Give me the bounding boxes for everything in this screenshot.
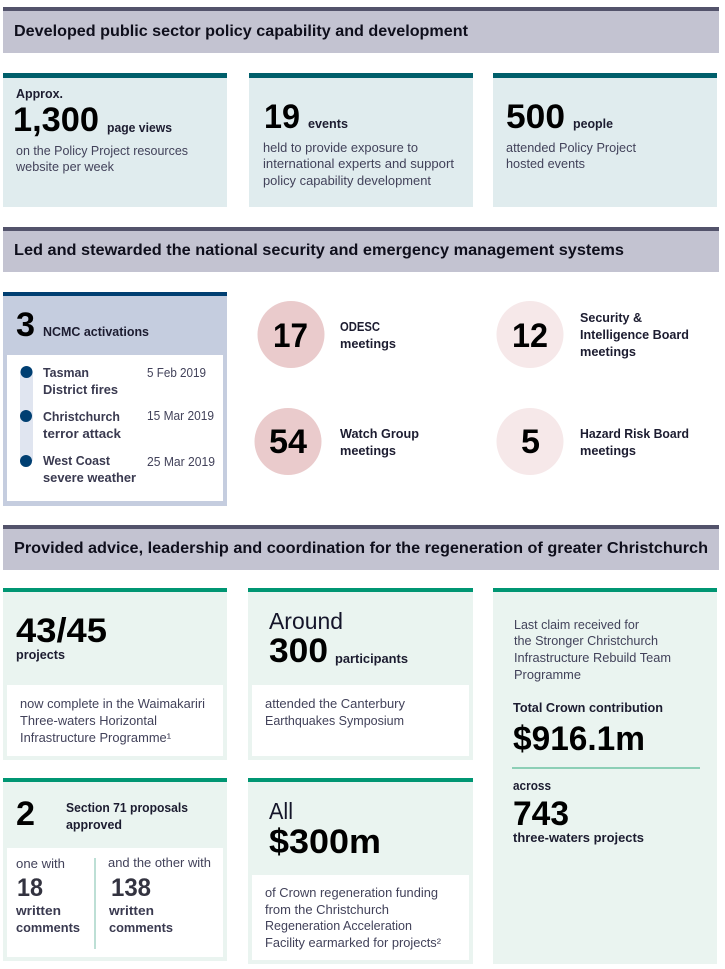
- stat: Security and Intelligence Board meetings: Intelligence Board: [580, 327, 689, 342]
- panel: participants: [248, 588, 473, 760]
- panel: NCMC activations: District fires: [43, 382, 118, 397]
- stat: Security and Intelligence Board meetings: 12: [512, 317, 548, 355]
- panel: people: 500: [506, 98, 565, 136]
- panel: participants: Around: [269, 608, 343, 634]
- panel: projects: Infrastructure Programme¹: [20, 730, 172, 745]
- panel: NCMC activations: 15 Mar 2019: [147, 408, 214, 423]
- panel: page views: website per week: [15, 159, 114, 174]
- panel: regeneration funding: All: [269, 798, 293, 824]
- timeline: [20, 366, 33, 467]
- panel: participants: participants: [335, 651, 408, 666]
- panel: projects: [3, 588, 227, 760]
- stat: Watch Group meetings: [254, 408, 419, 475]
- panel: Crown contribution: Total Crown contribution: [513, 700, 663, 715]
- panel: regeneration funding: of Crown regeneration funding: [265, 885, 438, 900]
- panel: Section 71 proposals: and the other with: [108, 855, 211, 870]
- panel: regeneration funding: from the Christchurch: [265, 902, 389, 917]
- section header: policy capability: Developed public sector policy capability and development: [14, 23, 469, 40]
- panel: Crown contribution: [493, 588, 717, 964]
- stat: Hazard Risk Board meetings: Hazard Risk Board: [580, 426, 689, 441]
- panel: events: events: [308, 116, 348, 131]
- stat: ODESC meetings: [258, 301, 396, 368]
- stat: ODESC meetings: meetings: [340, 336, 396, 351]
- panel: Section 71 proposals: one with: [16, 856, 65, 871]
- panel: NCMC activations: 25 Mar 2019: [147, 454, 215, 469]
- panel: people: people: [573, 116, 613, 131]
- stat: Watch Group meetings: meetings: [340, 443, 396, 458]
- panel: NCMC activations: terror attack: [43, 426, 122, 441]
- panel: Section 71 proposals: 138: [111, 874, 151, 902]
- panel: page views: page views: [107, 120, 172, 135]
- panel: regeneration funding: [248, 778, 473, 964]
- panel: Crown contribution: Infrastructure Rebuild Team: [514, 650, 671, 665]
- panel: events: 19: [264, 98, 300, 136]
- panel: projects: projects: [16, 647, 65, 662]
- panel: NCMC activations: West Coast: [43, 453, 111, 468]
- panel: events: [249, 73, 473, 207]
- panel: NCMC activations: Christchurch: [43, 409, 120, 424]
- panel: page views: [3, 73, 227, 207]
- panel: events: policy capability development: [263, 173, 431, 188]
- panel: Crown contribution: three-waters projects: [513, 830, 644, 845]
- panel: NCMC activations: [3, 292, 227, 506]
- panel: participants: 300: [269, 632, 328, 670]
- panel: page views: on the Policy Project resources: [16, 143, 188, 158]
- stat: Security and Intelligence Board meetings: Security &: [580, 310, 642, 325]
- stat: Security and Intelligence Board meetings: meetings: [580, 344, 636, 359]
- panel: Section 71 proposals: 18: [17, 874, 43, 902]
- panel: NCMC activations: 3: [16, 306, 35, 344]
- panel: Section 71 proposals: 2: [16, 795, 35, 833]
- section header: regeneration: Provided advice, leadership and coordination for the regeneration of greater Christchurch: [14, 540, 708, 557]
- panel: projects: 43/45: [16, 612, 107, 650]
- panel: Crown contribution: 743: [513, 795, 569, 833]
- panel: Crown contribution: Last claim received for: [514, 617, 640, 632]
- panel: projects: now complete in the Waimakariri: [20, 696, 205, 711]
- panel: people: [493, 73, 717, 207]
- panel: Section 71 proposals: approved: [66, 817, 122, 832]
- panel: NCMC activations: severe weather: [43, 470, 136, 485]
- panel: regeneration funding: Regeneration Acceleration: [265, 918, 412, 933]
- section header: policy capability: [3, 7, 719, 53]
- stat: Watch Group meetings: 54: [269, 423, 307, 461]
- panel: Section 71 proposals: comments: [109, 920, 173, 935]
- panel: people: attended Policy Project: [506, 140, 636, 155]
- panel: page views: Approx.: [16, 86, 63, 101]
- stat: ODESC meetings: ODESC: [340, 319, 381, 334]
- stat: Watch Group meetings: Watch Group: [340, 426, 419, 441]
- section header: regeneration: [3, 525, 719, 570]
- panel: regeneration funding: $300m: [269, 823, 381, 861]
- panel: Section 71 proposals: [3, 778, 227, 961]
- panel: NCMC activations: NCMC activations: [43, 324, 149, 339]
- panel: Crown contribution: the Stronger Christchurch: [514, 633, 658, 648]
- panel: Crown contribution: $916.1m: [513, 720, 645, 758]
- panel: page views: 1,300: [13, 101, 99, 139]
- panel: Section 71 proposals: comments: [16, 920, 80, 935]
- panel: Crown contribution: Programme: [514, 667, 581, 682]
- panel: projects: Three-waters Horizontal: [20, 713, 157, 728]
- section header: national security: Led and stewarded the national security and emergency management systems: [14, 242, 624, 259]
- panel: participants: attended the Canterbury: [265, 696, 405, 711]
- stat: Hazard Risk Board meetings: 5: [521, 423, 540, 461]
- panel: participants: Earthquakes Symposium: [265, 713, 404, 728]
- panel: events: international experts and support: [263, 156, 454, 171]
- panel: Section 71 proposals: written: [15, 903, 61, 918]
- panel: NCMC activations: Tasman: [43, 365, 89, 380]
- stat: Hazard Risk Board meetings: [496, 408, 689, 475]
- stat: ODESC meetings: 17: [273, 317, 308, 355]
- panel: people: hosted events: [506, 156, 585, 171]
- panel: regeneration funding: Facility earmarked for projects²: [265, 935, 442, 950]
- section header: national security: [3, 227, 719, 272]
- stat: Security and Intelligence Board meetings: [496, 301, 689, 368]
- panel: Section 71 proposals: written: [108, 903, 154, 918]
- panel: events: held to provide exposure to: [263, 140, 418, 155]
- panel: Section 71 proposals: Section 71 proposals: [66, 800, 188, 815]
- stat: Hazard Risk Board meetings: meetings: [580, 443, 636, 458]
- panel: Crown contribution: across: [513, 778, 551, 793]
- panel: NCMC activations: 5 Feb 2019: [147, 365, 206, 380]
